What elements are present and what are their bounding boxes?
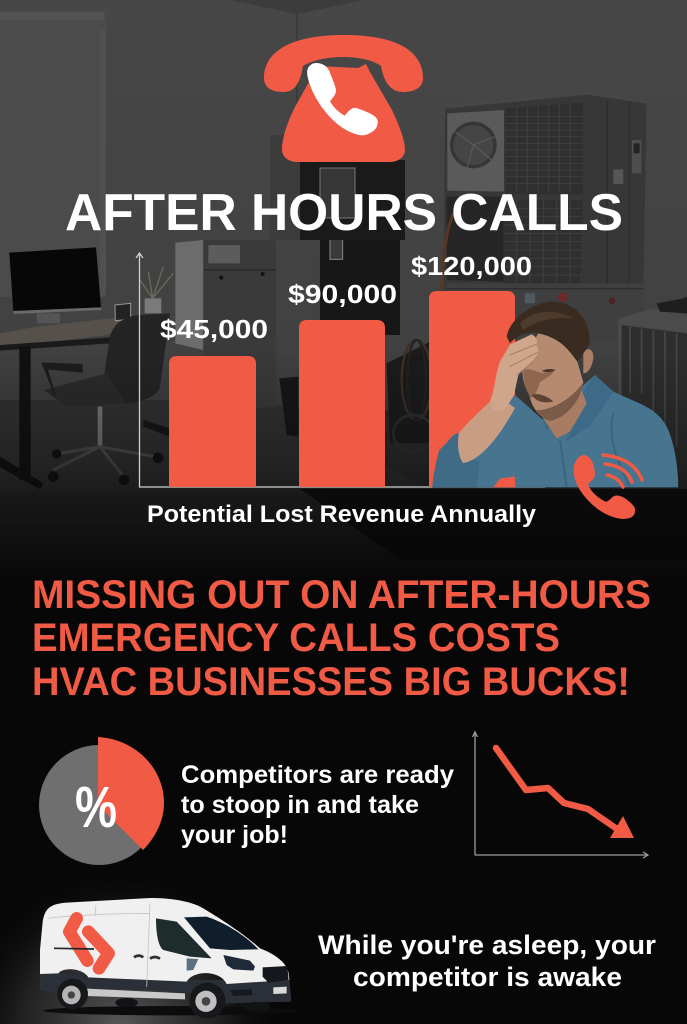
- bar: $120,000: [429, 291, 515, 487]
- van glow: [0, 865, 300, 1024]
- background: cabinets and tall unit: [175, 230, 433, 452]
- text: competitors ready: Competitors are ready: [181, 761, 454, 789]
- lower darkness overlay: [0, 0, 687, 580]
- lower dark trim: [40, 972, 291, 1003]
- door lines: [48, 903, 150, 987]
- caption: potential lost revenue annually: Potential Lost Revenue Annually: [147, 501, 537, 528]
- label: $45,000: $45,000: [160, 314, 268, 344]
- forearm: [458, 395, 515, 463]
- icon: ringing phone: [574, 455, 642, 518]
- background: desk with monitor and chair: [0, 247, 173, 489]
- text: competitor is awake: While you're asleep, your: [318, 930, 657, 960]
- headline: [32, 573, 651, 704]
- text: competitor is awake: competitor is awake: [353, 962, 622, 992]
- background: wall AC unit on the right: [618, 297, 687, 487]
- percent sign: %: [75, 775, 117, 840]
- torso: [432, 375, 678, 487]
- icon: red rotary telephone: [264, 35, 423, 162]
- illustration: stressed man holding his forehead: [432, 302, 678, 487]
- illustration: white service van: [40, 898, 297, 1019]
- head and hand: [507, 302, 593, 421]
- bar: $90,000: [299, 320, 385, 487]
- label: $120,000: $120,000: [411, 251, 532, 281]
- headline: EMERGENCY CALLS COSTS: [32, 616, 560, 660]
- headline: MISSING OUT ON AFTER-HOURS: [32, 573, 651, 617]
- ground shadow: [43, 1006, 297, 1015]
- title: AFTER HOURS CALLS: [65, 184, 623, 242]
- text: competitor is awake: [318, 930, 657, 992]
- text: competitors ready: your job!: [181, 821, 288, 849]
- pie chart with percent sign: [39, 737, 164, 865]
- bar: $45,000: [169, 356, 256, 487]
- background: large HVAC unit: [442, 91, 647, 340]
- dark table under man: [300, 489, 687, 560]
- hand: [490, 334, 539, 412]
- grille and headlight: [263, 966, 289, 983]
- logo: [69, 918, 109, 968]
- side rocker: [87, 989, 185, 999]
- background: dim HVAC office room: [0, 0, 687, 580]
- bar chart: potential lost revenue: [136, 251, 545, 487]
- line chart: falling trend: [472, 732, 648, 858]
- label: $90,000: $90,000: [288, 279, 397, 309]
- axes: [136, 253, 545, 487]
- wheels: [57, 979, 88, 1009]
- text: competitors ready: [181, 761, 454, 849]
- phone handset bar: [264, 35, 423, 92]
- windows: [156, 918, 212, 958]
- van body: [40, 898, 289, 984]
- white handset glyph: [308, 64, 377, 134]
- text: competitors ready: to stoop in and take: [181, 791, 419, 819]
- headline: HVAC BUSINESSES BIG BUCKS!: [32, 660, 630, 704]
- phone body: [282, 64, 405, 162]
